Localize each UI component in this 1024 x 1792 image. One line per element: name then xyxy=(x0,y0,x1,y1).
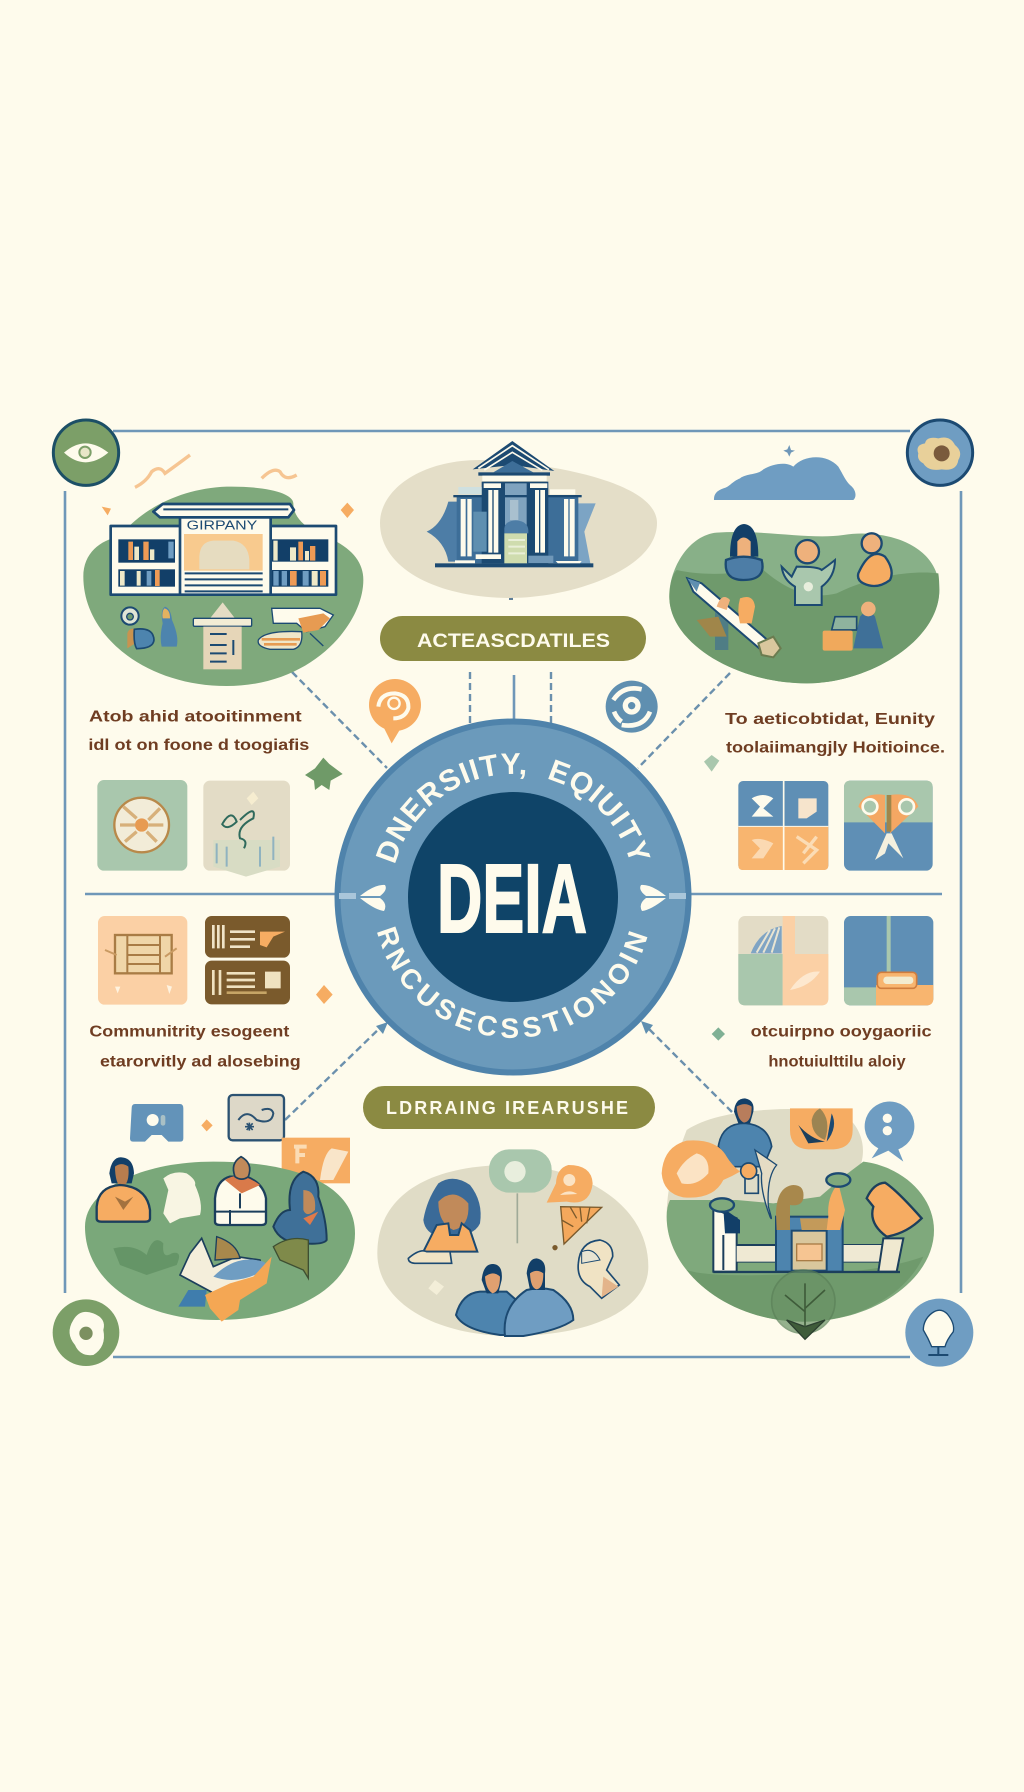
quadrant: bottom left xyxy=(53,916,355,1366)
icon: orange bubble xyxy=(547,1165,593,1203)
icon: person white robe xyxy=(215,1157,266,1225)
title: DEIA: DEIA xyxy=(437,844,587,953)
decoration: green star xyxy=(305,758,343,790)
panel: library blob xyxy=(83,487,363,686)
icon: man right xyxy=(505,1258,573,1336)
icon: woman curly hair xyxy=(408,1179,481,1263)
icon: campus building xyxy=(710,1173,922,1272)
curved text: top: DNERSIITY, EQIUITY xyxy=(376,753,650,863)
icon: library building xyxy=(111,504,336,595)
corner icon: pawn xyxy=(905,1299,973,1367)
pill: top heading: ACTEASCDATILES xyxy=(417,631,610,652)
tile: compass xyxy=(97,780,187,871)
decoration: sparkles xyxy=(102,503,354,518)
icon: person in orange xyxy=(858,533,892,586)
icon: man left xyxy=(456,1264,520,1335)
quadrant: top right xyxy=(606,420,973,871)
tile: orange bookshelf xyxy=(98,916,187,1005)
tile: fan and leaf xyxy=(738,916,828,1005)
decoration: small star xyxy=(783,445,795,457)
icon: seated person with books xyxy=(823,602,883,651)
decoration: birds xyxy=(135,455,297,487)
text: bottom-left caption: etarorvitly ad alosebing xyxy=(100,1054,301,1071)
pill: bottom heading xyxy=(363,1086,655,1129)
icon: person orange xyxy=(97,1157,150,1222)
icon: library building: GIRPANY xyxy=(187,518,258,532)
icon: squiggle tile xyxy=(229,1095,284,1140)
quadrant: top left xyxy=(53,420,421,877)
blob: bottom centre xyxy=(377,1165,648,1336)
text: top-right caption xyxy=(725,711,945,756)
ring markers xyxy=(339,885,686,911)
icon: leaves xyxy=(113,1240,179,1275)
icon: blue target xyxy=(606,681,658,733)
icon: blue tile xyxy=(130,1104,183,1142)
decoration: mint diamond xyxy=(704,755,719,772)
panel: community blob xyxy=(85,1162,355,1320)
icon: cloud xyxy=(714,457,856,500)
text: bottom-left caption xyxy=(89,1024,301,1071)
icon: seed badge xyxy=(790,1108,853,1149)
decoration: mint diamond xyxy=(712,1027,725,1041)
panel: campus blob xyxy=(667,1109,934,1322)
icon: blue speech bubble xyxy=(865,1102,914,1162)
icon: orange tile xyxy=(282,1138,350,1183)
connector lines xyxy=(285,584,732,1120)
icon: orange leaf bubble xyxy=(662,1140,740,1198)
decoration: small diamond xyxy=(201,1119,213,1131)
icon: pencil and figure xyxy=(687,578,781,657)
text: top-left caption xyxy=(88,709,309,754)
central badge xyxy=(334,718,692,1076)
icon: document pavilion xyxy=(193,602,252,669)
icon: person long hair xyxy=(726,524,763,580)
icon: person blue xyxy=(718,1098,777,1219)
quadrant: bottom right xyxy=(662,916,973,1367)
icon: striped triangle xyxy=(552,1207,602,1250)
text: top-left caption: idl ot on foone d toogiafis xyxy=(88,737,309,754)
tile: brown list boxes xyxy=(205,916,290,1004)
text: bottom-left caption: Communitrity esogeent xyxy=(89,1024,290,1041)
icon: face profile xyxy=(578,1240,619,1298)
tile: calligraphy xyxy=(203,781,290,877)
text: top-right caption: toolaiimangjly Hoitioince. xyxy=(726,739,945,756)
text: top-left caption: Atob ahid atooitinment xyxy=(89,709,302,726)
tile: blue book xyxy=(844,916,933,1005)
text: top-right caption: To aeticobtidat, Eunity xyxy=(725,711,935,728)
text: bottom-right caption xyxy=(751,1024,932,1071)
pill: top heading xyxy=(380,616,646,661)
corner icon: gear xyxy=(907,420,973,485)
icon: white garment xyxy=(163,1172,201,1223)
ring xyxy=(338,722,688,1072)
tile: four-split icons xyxy=(738,781,828,870)
decoration: small leaf xyxy=(428,1280,444,1295)
blob: top centre xyxy=(380,460,657,598)
icon: orange pin xyxy=(369,679,421,743)
inner circle xyxy=(408,792,618,1002)
panel: top centre museum xyxy=(380,441,657,598)
tile: scissors xyxy=(844,781,933,871)
icon: sprout xyxy=(772,1270,835,1339)
icon: small figures xyxy=(121,607,177,649)
panel: people blob xyxy=(669,532,939,683)
icon: person blue hair xyxy=(273,1172,327,1278)
pill: bottom heading: LDRRAING IREARUSHE xyxy=(386,1098,628,1118)
decoration: orange diamond xyxy=(316,985,333,1004)
frame lines xyxy=(65,431,961,1357)
text: bottom-right caption: otcuirpno ooygaoriic xyxy=(751,1024,932,1041)
corner icon: flower xyxy=(53,1299,119,1366)
curved text: bottom: RNCUSECSSTIONOIN xyxy=(377,926,648,1038)
panel: bottom centre people xyxy=(377,1149,648,1336)
icon: museum building xyxy=(427,441,596,567)
icon: origami bird xyxy=(178,1237,272,1322)
text: bottom-right caption: hnotuiulttilu aloiy xyxy=(768,1054,906,1071)
icon: person with raised arms xyxy=(782,540,835,605)
icon: books and tools xyxy=(258,608,333,649)
corner icon: eye xyxy=(53,420,119,485)
icon: mint bubble xyxy=(489,1149,552,1243)
